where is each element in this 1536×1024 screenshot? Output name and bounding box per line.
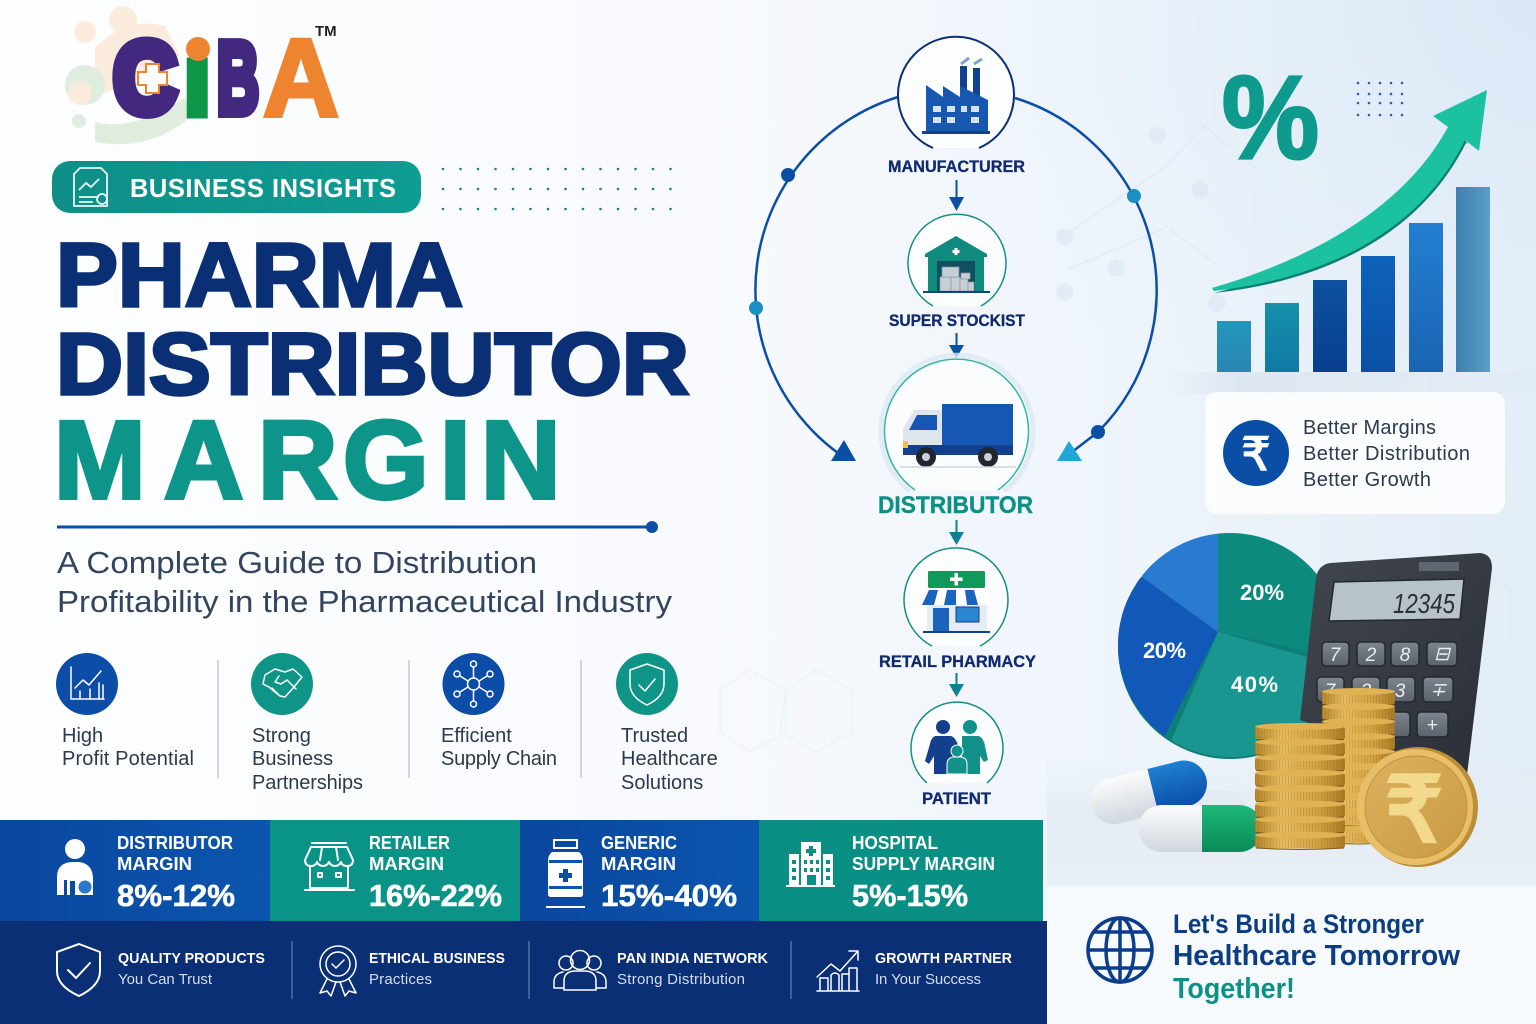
coin stack: front bbox=[1255, 723, 1345, 850]
calculator keys: 7 bbox=[1325, 681, 1337, 702]
feature: high profit potential: Profit Potential bbox=[62, 748, 194, 770]
feature: trusted healthcare solutions: Solutions bbox=[621, 772, 703, 794]
title: MARGIN bbox=[54, 399, 560, 522]
icon: growth chart bbox=[817, 951, 859, 991]
node: retail pharmacy bbox=[879, 548, 1036, 671]
feature: strong business partnerships: Business bbox=[252, 748, 333, 770]
subtitle bbox=[57, 545, 673, 619]
calculator bbox=[1300, 553, 1492, 775]
node: distributor bbox=[878, 355, 1033, 519]
feature: high profit potential bbox=[56, 653, 194, 770]
cell: distributor margin: 8%-12% bbox=[117, 878, 235, 913]
calculator keys bbox=[1317, 642, 1457, 737]
pill: green and white bbox=[1138, 805, 1262, 852]
cell: distributor margin: DISTRIBUTOR bbox=[117, 832, 233, 853]
pie chart: 20% bbox=[1143, 638, 1186, 663]
cell: retailer margin: MARGIN bbox=[369, 853, 444, 874]
cell: retailer margin bbox=[270, 820, 520, 921]
item: growth partner: GROWTH PARTNER bbox=[875, 950, 1012, 967]
icon: shield bbox=[57, 944, 100, 996]
item: quality products: QUALITY PRODUCTS bbox=[118, 950, 265, 967]
item: ethical business: Practices bbox=[369, 971, 432, 988]
badge: business insights: BUSINESS INSIGHTS bbox=[130, 175, 396, 203]
item: quality products: You Can Trust bbox=[118, 971, 213, 988]
card: better margins: Better Growth bbox=[1303, 469, 1431, 491]
calculator keys: 2 bbox=[1360, 681, 1372, 702]
cell: distributor margin: MARGIN bbox=[117, 853, 192, 874]
node: retail pharmacy: RETAIL PHARMACY bbox=[879, 653, 1036, 671]
feature: trusted healthcare solutions bbox=[616, 653, 718, 794]
pie chart bbox=[1118, 533, 1317, 759]
icon: rupee: ₹ bbox=[1241, 428, 1271, 480]
cell: retailer margin: 16%-22% bbox=[369, 878, 502, 913]
pie chart: 20% bbox=[1240, 580, 1284, 605]
feature: strong business partnerships: Partnerships bbox=[252, 772, 363, 794]
cell: generic margin: GENERIC bbox=[601, 832, 677, 853]
calculator solar strip bbox=[1419, 562, 1459, 571]
title bbox=[54, 226, 689, 522]
calculator keys: ∓ bbox=[1430, 680, 1447, 701]
trust dividers bbox=[292, 941, 791, 999]
cross in C bbox=[138, 64, 167, 93]
arrow: super stockist to distributor bbox=[949, 333, 964, 358]
icon: people bbox=[554, 950, 606, 990]
item: ethical business: ETHICAL BUSINESS bbox=[369, 950, 505, 967]
feature: efficient supply chain bbox=[441, 653, 557, 770]
logo: CiBA bbox=[65, 6, 339, 144]
node: distributor: DISTRIBUTOR bbox=[878, 492, 1033, 519]
calculator keys: 7 bbox=[1330, 645, 1342, 666]
trust band bbox=[0, 921, 1047, 1024]
arrow: distributor to retail pharmacy bbox=[949, 520, 964, 545]
supply chain arcs bbox=[749, 97, 1157, 461]
cell: distributor margin bbox=[0, 820, 270, 921]
item: pan india network: PAN INDIA NETWORK bbox=[617, 950, 768, 967]
rupee coin: ₹ bbox=[1385, 761, 1443, 861]
feature: trusted healthcare solutions: Trusted bbox=[621, 725, 688, 747]
feature: strong business partnerships bbox=[251, 653, 363, 794]
calculator screen bbox=[1329, 579, 1464, 621]
feature: high profit potential: High bbox=[62, 725, 103, 747]
calculator keys: ⊟ bbox=[1434, 644, 1452, 665]
logo: CiBA: ı bbox=[183, 23, 211, 137]
back capsule bbox=[1170, 790, 1246, 824]
calculator keys: 2 bbox=[1365, 645, 1377, 666]
cell: hospital supply margin: 5%-15% bbox=[852, 878, 968, 913]
node: super stockist bbox=[889, 214, 1025, 330]
node: manufacturer bbox=[888, 37, 1025, 176]
dot of i bbox=[186, 37, 210, 61]
pill: blue and white bbox=[1086, 756, 1212, 829]
node: patient bbox=[911, 702, 1003, 808]
cell: generic margin: 15%-40% bbox=[601, 878, 737, 913]
node: manufacturer: MANUFACTURER bbox=[888, 158, 1025, 176]
logo: CiBA: B bbox=[217, 23, 259, 135]
arrow: retail pharmacy to patient bbox=[949, 673, 964, 697]
item: growth partner: In Your Success bbox=[875, 971, 981, 988]
subtitle: A Complete Guide to Distribution bbox=[57, 545, 537, 580]
item: ethical business bbox=[320, 946, 505, 996]
icon: globe bbox=[1088, 918, 1152, 982]
cell: hospital supply margin: HOSPITAL bbox=[852, 832, 938, 853]
decorative molecule network bbox=[720, 122, 1510, 790]
icon: medal bbox=[320, 946, 356, 996]
title underline bbox=[57, 521, 658, 533]
calculator: 12345 bbox=[1393, 588, 1455, 619]
feature: efficient supply chain: Efficient bbox=[441, 725, 512, 747]
item: growth partner bbox=[817, 950, 1012, 991]
arrowhead left bbox=[831, 440, 856, 461]
icon: family bbox=[925, 720, 988, 774]
calculator keys: 8 bbox=[1400, 645, 1411, 666]
percent sign: % bbox=[1222, 52, 1319, 184]
card: better margins: Better Distribution bbox=[1303, 443, 1470, 465]
logo: CiBA: A bbox=[263, 17, 339, 140]
calculator keys: 3 bbox=[1395, 681, 1406, 702]
icon: hospital bbox=[786, 842, 835, 887]
cell: hospital supply margin: SUPPLY MARGIN bbox=[852, 853, 995, 874]
title: DISTRIBUTOR bbox=[56, 316, 689, 413]
card: better margins bbox=[1205, 392, 1505, 514]
icon: truck bbox=[900, 404, 1016, 467]
cell: generic margin bbox=[520, 820, 759, 921]
growth bar chart bbox=[1168, 187, 1536, 394]
node: super stockist: SUPER STOCKIST bbox=[889, 312, 1025, 330]
margin band bbox=[0, 820, 1043, 921]
icon: shop bbox=[305, 843, 354, 890]
cell: hospital supply margin bbox=[759, 820, 1043, 921]
feature: efficient supply chain: Supply Chain bbox=[441, 748, 557, 770]
logo splash bbox=[65, 6, 190, 144]
rupee coin bbox=[1357, 747, 1478, 867]
logo: CiBA: C bbox=[114, 22, 176, 133]
arrow: manufacturer to super stockist bbox=[949, 180, 964, 211]
coin stack: back bbox=[1322, 688, 1395, 844]
calculator keys: + bbox=[1426, 715, 1438, 736]
pie chart: 40% bbox=[1231, 672, 1278, 697]
node: patient: PATIENT bbox=[922, 790, 991, 808]
feature: trusted healthcare solutions: Healthcare bbox=[621, 748, 718, 770]
card: better margins: Better Margins bbox=[1303, 417, 1436, 439]
feature: strong business partnerships: Strong bbox=[252, 725, 311, 747]
floor surface bbox=[1047, 760, 1536, 886]
title: PHARMA bbox=[56, 226, 463, 326]
subtitle: Profitability in the Pharmaceutical Industry bbox=[57, 584, 673, 619]
item: pan india network: Strong Distribution bbox=[617, 971, 745, 988]
arc nodes bbox=[749, 168, 1141, 439]
closing panel: Let's Build a Stronger bbox=[1173, 909, 1424, 939]
item: quality products bbox=[57, 944, 265, 996]
growth arrow bbox=[1212, 90, 1487, 293]
cell: retailer margin: RETAILER bbox=[369, 832, 450, 853]
dotted pattern bbox=[442, 168, 672, 210]
item: pan india network bbox=[554, 950, 768, 990]
icon: bottle bbox=[546, 840, 585, 908]
closing panel: Together! bbox=[1173, 973, 1295, 1005]
badge: business insights bbox=[52, 161, 421, 213]
icon: person bbox=[57, 839, 93, 895]
cell: generic margin: MARGIN bbox=[601, 853, 676, 874]
icon: rupee bbox=[1223, 420, 1289, 486]
icon: warehouse bbox=[923, 236, 990, 293]
closing panel: Healthcare Tomorrow bbox=[1173, 940, 1460, 972]
shelf bbox=[1168, 372, 1536, 394]
arrowhead right bbox=[1057, 441, 1082, 461]
icon: factory bbox=[922, 58, 990, 134]
dot grid bbox=[1357, 82, 1403, 116]
logo: CiBA: TM bbox=[315, 23, 337, 40]
icon: report bbox=[74, 168, 107, 206]
closing panel bbox=[1047, 886, 1536, 1024]
icon: pharmacy shop bbox=[922, 571, 992, 633]
feature dividers bbox=[218, 660, 581, 778]
